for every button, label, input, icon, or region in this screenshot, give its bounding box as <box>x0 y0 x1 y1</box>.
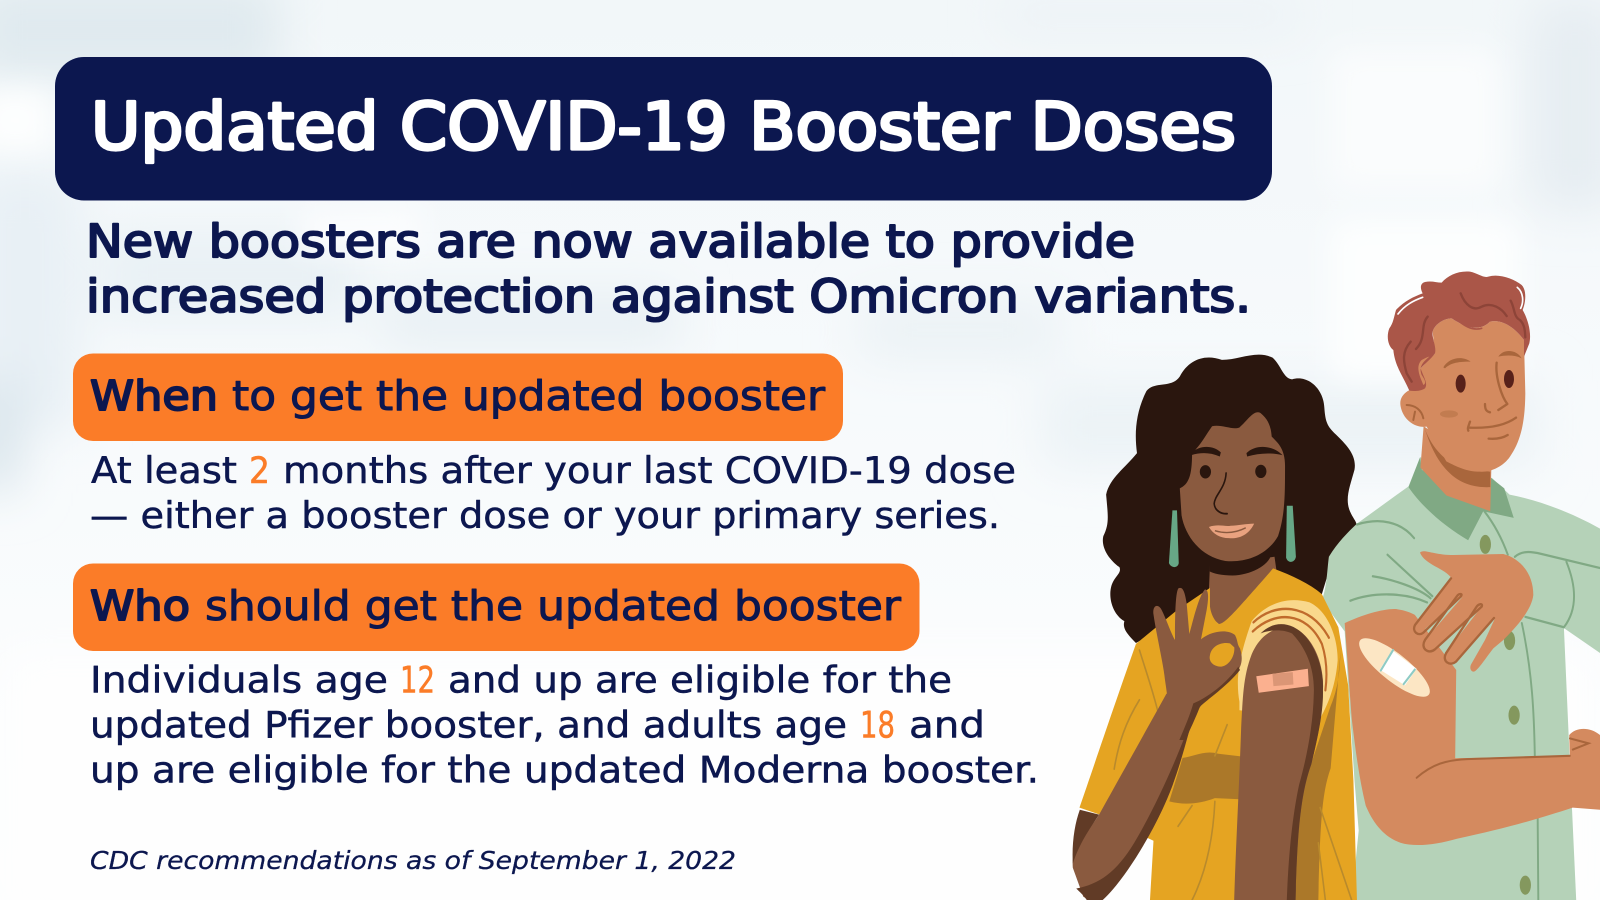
man: shirt buttons <box>1480 535 1531 895</box>
section body text: and <box>909 704 985 746</box>
woman: sleeve cuff stripes <box>1253 609 1329 690</box>
woman: dress <box>1079 568 1357 900</box>
woman: earrings <box>1169 506 1296 567</box>
section heading text: Who <box>90 582 190 630</box>
man: neck <box>1420 426 1491 511</box>
man: hair <box>1388 272 1530 391</box>
section body text: 12 <box>400 658 435 702</box>
section body text: — either a booster dose or your primary series. <box>90 494 1000 537</box>
woman: forearm shadow <box>1073 711 1195 900</box>
woman: body <box>1073 412 1357 900</box>
man: ear detail <box>1407 405 1423 420</box>
woman: choker shadow <box>1210 555 1271 575</box>
title banner <box>55 57 1272 200</box>
woman: sleeve cuff <box>1238 600 1338 718</box>
title text: Updated COVID-19 Booster Doses <box>91 90 1236 165</box>
woman: forearm <box>1073 694 1201 899</box>
woman: dress fold lines <box>1114 650 1352 900</box>
man: collar <box>1409 457 1514 540</box>
woman: okay-sign hand <box>1147 588 1242 740</box>
man: face and ear <box>1400 318 1525 472</box>
woman: neck <box>1208 557 1278 636</box>
man: face features <box>1440 351 1522 439</box>
section body text: months after your last COVID-19 dose <box>283 449 1016 492</box>
section heading pill <box>73 564 920 651</box>
woman: raised arm <box>1234 628 1323 900</box>
man: forelock highlight <box>1418 357 1429 385</box>
subtitle text <box>86 215 1251 323</box>
man: shirt <box>1322 457 1600 900</box>
man: neck shadow <box>1425 428 1490 487</box>
section heading text: should get the updated booster <box>205 582 901 630</box>
title background <box>55 57 1272 200</box>
woman: hair <box>1103 355 1356 643</box>
man: head <box>1388 272 1530 472</box>
section body text: 18 <box>860 704 895 746</box>
woman: raised arm shadow <box>1260 624 1323 900</box>
footnote: CDC recommendations as of September 1, 2022 <box>90 846 736 875</box>
section heading text: When <box>90 372 218 420</box>
illustration: two vaccinated people showing bandaged arms <box>1073 272 1600 900</box>
section body text: Individuals age <box>90 658 388 702</box>
section body text: 2 <box>249 449 270 492</box>
section: when to get the updated booster <box>73 354 1016 537</box>
section body text: and up are eligible for the <box>448 658 952 702</box>
woman: dress right shadow <box>1292 644 1341 900</box>
section body text: At least <box>91 449 237 492</box>
subtitle text: increased protection against Omicron variants. <box>86 270 1251 323</box>
man: bandage on arm <box>1353 629 1436 706</box>
section body text: up are eligible for the updated Moderna booster. <box>90 748 1039 792</box>
subtitle text: New boosters are now available to provide <box>86 215 1135 268</box>
section heading text: to get the updated booster <box>232 372 825 420</box>
woman: bandage <box>1256 669 1309 693</box>
man: hair strands <box>1398 287 1525 382</box>
man: hand on shoulder <box>1413 551 1533 672</box>
section body text: updated Pfizer booster, and adults age <box>90 704 847 746</box>
man: arm crease lines <box>1417 738 1588 778</box>
section body text <box>90 658 1039 792</box>
woman: face <box>1180 412 1285 561</box>
section body text <box>90 449 1016 537</box>
woman: dress shadow band <box>1169 752 1243 804</box>
woman: eyes, brows, nose and lips <box>1191 447 1283 538</box>
man: shirt seams and placket <box>1350 511 1600 900</box>
woman's hair and man's figure, drawn behind woman's body <box>1103 355 1600 900</box>
man: bare upper arm and forearm <box>1345 609 1600 845</box>
section: who should get the updated booster <box>73 564 1039 792</box>
section heading pill <box>73 354 843 441</box>
